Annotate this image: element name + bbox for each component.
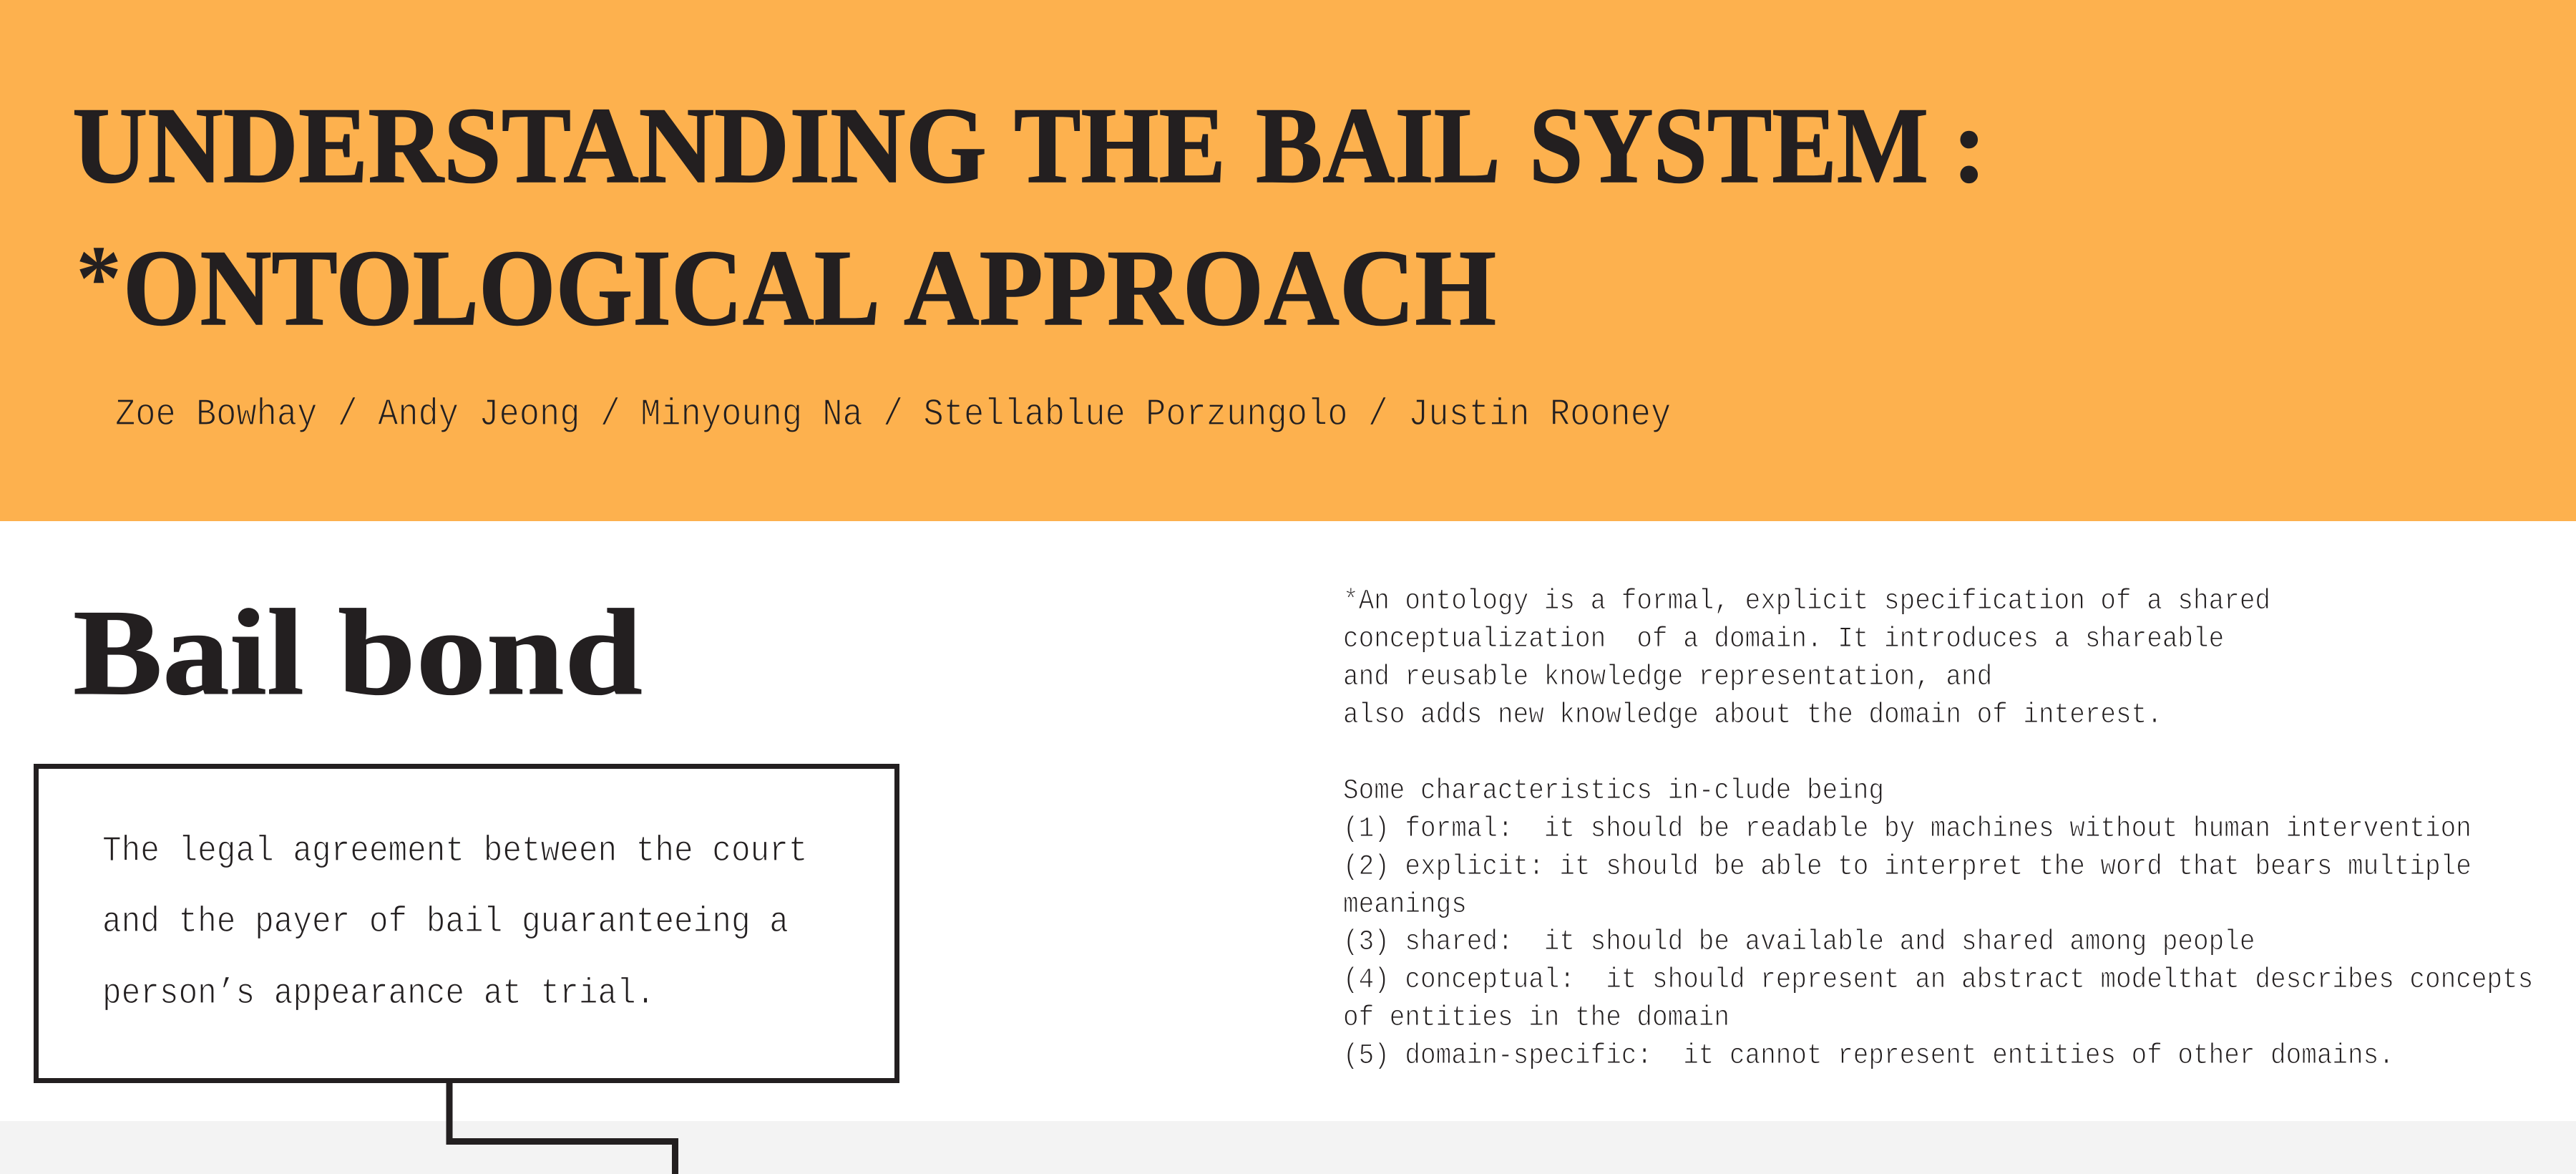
ontology explanation text: (5) domain-specific: it cannot represent entities of other domains. <box>1343 1039 2394 1072</box>
definition text <box>102 832 807 1014</box>
definition text: person’s appearance at trial. <box>102 974 655 1014</box>
definition text: The legal agreement between the court <box>102 832 807 872</box>
ontology explanation text <box>1343 585 2533 1072</box>
heading: Bail bond: Bail <box>73 585 304 721</box>
ontology explanation text: *An ontology is a formal, explicit specification of a shared <box>1343 585 2270 618</box>
title: SYSTEM <box>1529 85 1928 205</box>
ontology explanation text: of entities in the domain <box>1343 1001 1729 1034</box>
ontology explanation text: (2) explicit: it should be able to interpret the word that bears multiple <box>1343 850 2472 883</box>
authors: Zoe Bowhay / Andy Jeong / Minyoung Na / Stellablue Porzungolo / Justin Rooney <box>115 394 1671 437</box>
definition text: and the payer of bail guaranteeing a <box>102 903 789 943</box>
connector arrow from definition box <box>449 1081 675 1174</box>
title: ONTOLOGICAL <box>123 228 880 348</box>
title <box>72 85 1988 348</box>
definition box <box>36 766 897 1081</box>
header band <box>0 0 2576 521</box>
ontology explanation text: (1) formal: it should be readable by machines without human intervention <box>1343 812 2472 845</box>
ontology explanation text: conceptualization of a domain. It introduces a shareable <box>1343 623 2224 656</box>
ontology explanation text: Some characteristics in-clude being <box>1343 775 1884 807</box>
ontology explanation text: (4) conceptual: it should represent an abstract modelthat describes concepts <box>1343 964 2533 996</box>
ontology explanation text: (3) shared: it should be available and shared among people <box>1343 926 2255 959</box>
title: BAIL <box>1256 85 1501 205</box>
heading: Bail bond <box>73 585 643 721</box>
ontology explanation text: and reusable knowledge representation, and <box>1343 661 1992 694</box>
title: UNDERSTANDING <box>72 85 987 205</box>
title: APPROACH <box>904 228 1496 348</box>
ontology explanation text: meanings <box>1343 888 1467 921</box>
title: * <box>76 227 122 330</box>
heading: Bail bond: bond <box>338 585 643 721</box>
title: : <box>1951 85 1988 205</box>
footer band <box>0 1121 2576 1174</box>
ontology explanation text: also adds new knowledge about the domain of interest. <box>1343 699 2162 732</box>
title: THE <box>1014 85 1226 205</box>
